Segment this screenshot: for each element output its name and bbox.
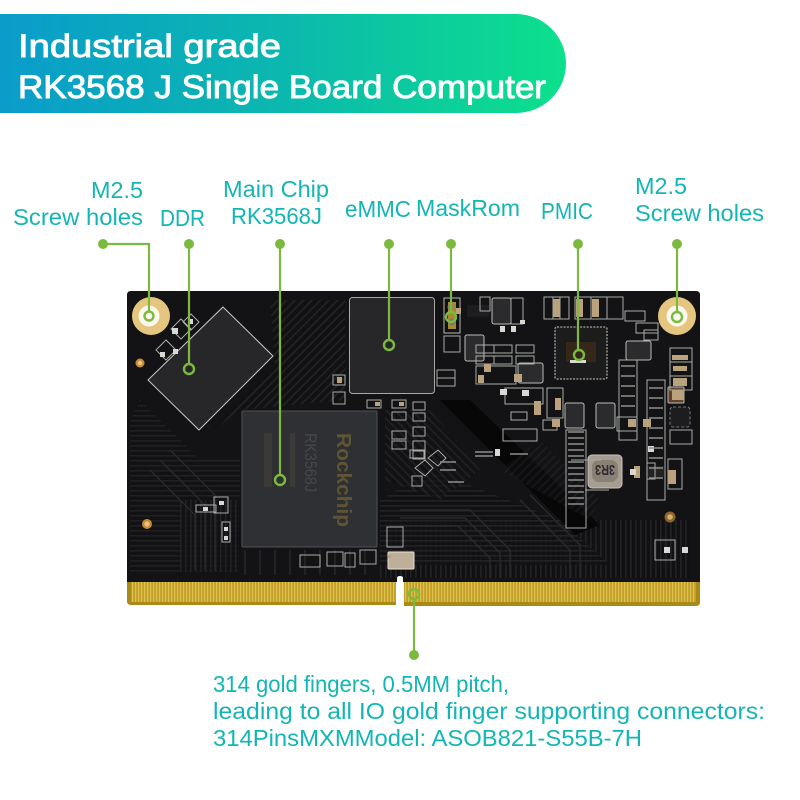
label: left M2.5 screw holes: Screw holes <box>13 204 143 230</box>
callout: DDR <box>184 239 194 374</box>
callout: gold fingers <box>409 589 419 660</box>
capacitor pads <box>337 299 688 558</box>
MaskRom jumper <box>444 298 460 333</box>
label: eMMC: eMMC <box>345 196 411 222</box>
white pads <box>160 319 688 553</box>
DDR chip <box>148 307 273 430</box>
small regulators and inductors <box>465 298 690 477</box>
label: PMIC: PMIC <box>541 198 593 224</box>
passive component outlines <box>156 297 692 567</box>
label: main chip: Main Chip <box>223 176 329 202</box>
callout: right screw hole <box>672 239 682 322</box>
label: main chip: RK3568J <box>231 203 322 229</box>
Rockchip logo: Rockchip <box>332 433 354 527</box>
crystal <box>388 552 414 569</box>
trace areas <box>130 300 690 578</box>
label: right M2.5 screw holes: Screw holes <box>635 200 764 226</box>
3R3 inductor <box>588 455 622 488</box>
gold fingers description: 314PinsMXMModel: ASOB821-S55B-7H <box>213 725 642 751</box>
callout: left screw hole <box>98 239 154 320</box>
label: left M2.5 screw holes: M2.5 <box>91 177 143 203</box>
faint chip batch markings <box>264 433 295 487</box>
gold fingers description: leading to all IO gold finger supporting connectors: <box>213 698 765 724</box>
callout: eMMC <box>384 239 394 350</box>
PMIC chip <box>555 327 607 379</box>
left screw hole <box>132 297 170 335</box>
callout: MaskRom <box>446 239 456 322</box>
title line 1: Industrial grade <box>18 28 281 64</box>
right screw hole <box>658 297 696 335</box>
callout: main chip <box>275 239 285 485</box>
small vias <box>136 358 676 529</box>
gold fingers description <box>213 671 765 751</box>
label: left M2.5 screw holes <box>13 177 143 230</box>
title line 2: RK3568 J Single Board Computer <box>18 69 546 105</box>
eMMC chip <box>350 298 434 394</box>
silkscreen resistor ladder <box>440 366 663 504</box>
label: MaskRom: MaskRom <box>416 195 520 221</box>
label: main chip <box>223 176 329 229</box>
gold fingers <box>127 576 700 606</box>
label: right M2.5 screw holes <box>635 173 764 226</box>
label: DDR: DDR <box>160 205 205 231</box>
banner background <box>0 14 566 113</box>
label: right M2.5 screw holes: M2.5 <box>635 173 687 199</box>
gold fingers description: 314 gold fingers, 0.5MM pitch, <box>213 671 509 697</box>
main chip <box>242 411 377 547</box>
title banner <box>0 14 566 113</box>
chip model marking: RK3568J <box>301 433 320 492</box>
3R3 inductor: 3R3 <box>595 461 615 478</box>
circuit board <box>127 291 700 606</box>
callout: PMIC <box>573 239 584 360</box>
board base <box>127 291 700 582</box>
